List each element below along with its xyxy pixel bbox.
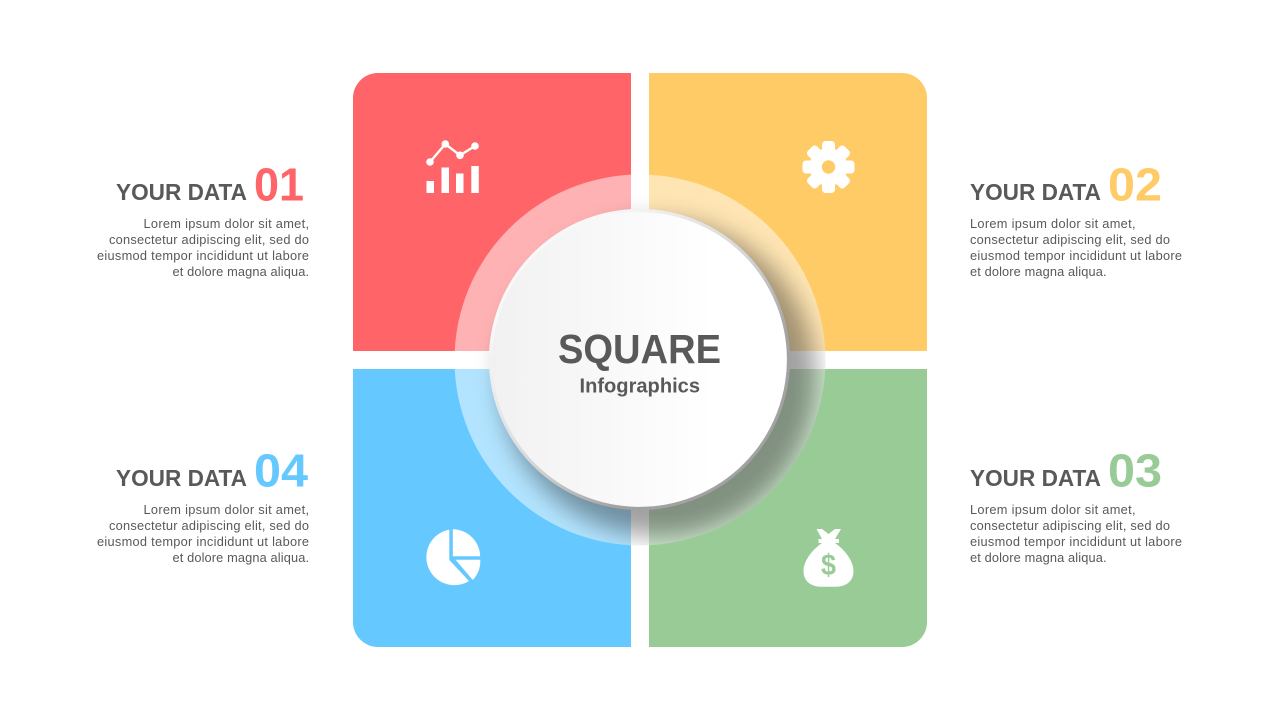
panel: red square xyxy=(353,73,631,351)
center title: SQUARE xyxy=(558,326,721,372)
text block 01 xyxy=(97,158,309,279)
panel: yellow square xyxy=(649,73,927,351)
text block 03 xyxy=(970,444,1182,565)
body xyxy=(970,502,1182,565)
body: Lorem ipsum dolor sit amet, xyxy=(144,216,309,231)
ring shadow xyxy=(500,220,816,536)
heading: YOUR DATA xyxy=(116,179,247,205)
body: Lorem ipsum dolor sit amet, xyxy=(144,502,309,517)
center circle xyxy=(490,210,788,508)
body: et dolore magna aliqua. xyxy=(970,550,1106,565)
body: et dolore magna aliqua. xyxy=(970,264,1106,279)
panel: green square xyxy=(649,369,927,647)
text block 04 xyxy=(97,444,309,565)
body: et dolore magna aliqua. xyxy=(172,264,309,279)
body: consectetur adipiscing elit, sed do xyxy=(109,232,309,247)
icon: pie chart xyxy=(426,529,480,585)
translucent ring xyxy=(454,174,826,546)
number: 01 xyxy=(254,158,304,210)
number: 04 xyxy=(254,444,308,496)
heading: YOUR DATA xyxy=(970,465,1101,491)
icon: line and bar chart xyxy=(426,140,479,193)
body: eiusmod tempor incididunt ut labore xyxy=(970,534,1182,549)
body: Lorem ipsum dolor sit amet, xyxy=(970,216,1136,231)
body: consectetur adipiscing elit, sed do xyxy=(970,518,1170,533)
body: consectetur adipiscing elit, sed do xyxy=(109,518,309,533)
number: 02 xyxy=(1108,158,1162,210)
text block 02 xyxy=(970,158,1182,279)
icon: gear xyxy=(802,141,854,193)
body xyxy=(970,216,1182,279)
body: et dolore magna aliqua. xyxy=(172,550,309,565)
body xyxy=(97,502,309,565)
icon: money bag xyxy=(804,529,854,587)
body: Lorem ipsum dolor sit amet, xyxy=(970,502,1136,517)
panel: blue square xyxy=(353,369,631,647)
dollar sign: $ xyxy=(821,549,836,582)
body xyxy=(97,216,309,279)
body: eiusmod tempor incididunt ut labore xyxy=(970,248,1182,263)
body: eiusmod tempor incididunt ut labore xyxy=(97,248,309,263)
heading: YOUR DATA xyxy=(970,179,1101,205)
body: consectetur adipiscing elit, sed do xyxy=(970,232,1170,247)
number: 03 xyxy=(1108,444,1162,496)
body: eiusmod tempor incididunt ut labore xyxy=(97,534,309,549)
heading: YOUR DATA xyxy=(116,465,247,491)
center subtitle: Infographics xyxy=(580,376,700,398)
